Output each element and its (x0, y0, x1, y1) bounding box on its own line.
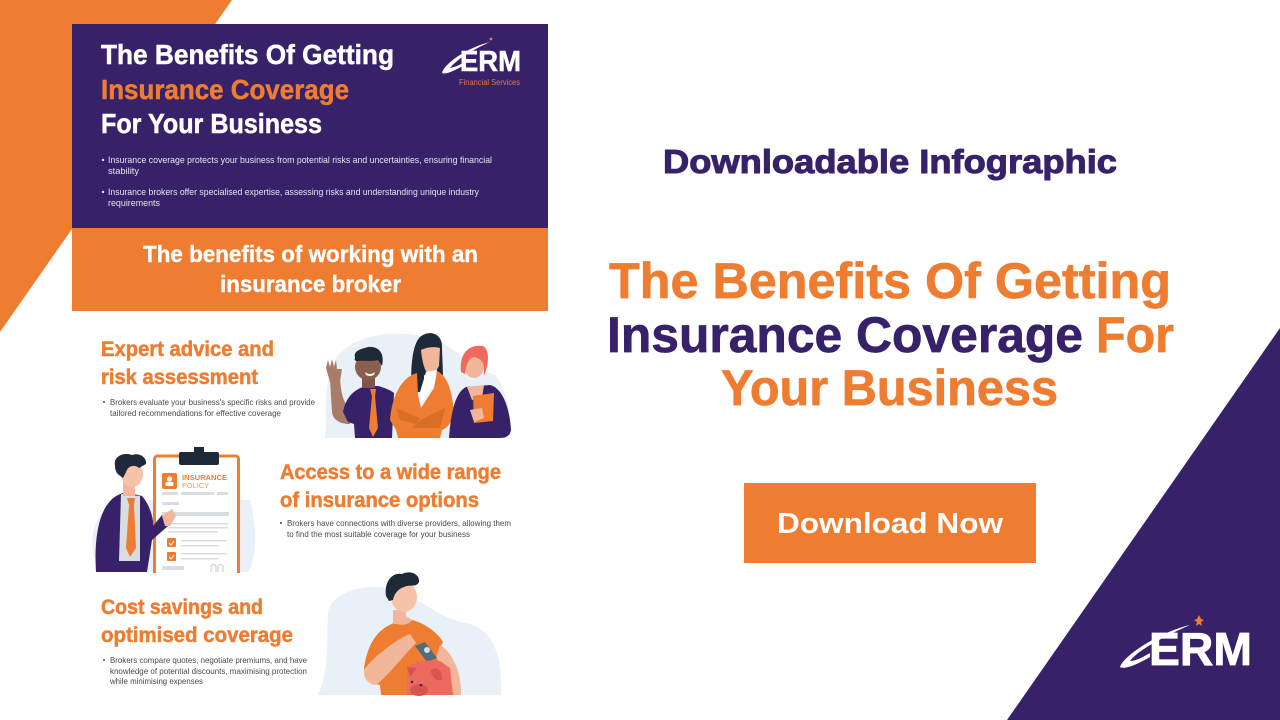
section: wide range of options (92, 447, 511, 573)
infographic title: For Your Business (101, 108, 322, 139)
clipboard: INSURANCE (182, 473, 227, 482)
man waving (326, 347, 394, 438)
heading: cost savings: optimised coverage (101, 623, 293, 647)
text: expert advice bullet (103, 397, 315, 418)
text: cost savings bullet (103, 655, 307, 686)
text: wide range bullet: Brokers have connections with diverse providers, allowing them (287, 518, 511, 528)
panel: orange section banner: The benefits of working with an (143, 241, 478, 267)
purple corner triangle (1007, 328, 1280, 720)
text: expert advice bullet: Brokers evaluate your business's specific risks and provide (110, 397, 315, 407)
heading: wide range of options: of insurance options (280, 488, 479, 512)
text: cost savings bullet: Brokers compare quotes, negotiate premiums, and have (110, 655, 307, 665)
clipboard (154, 447, 238, 573)
heading: expert advice (101, 337, 274, 389)
heading: expert advice: risk assessment (101, 365, 258, 389)
main heading: The Benefits Of Getting (609, 253, 1171, 309)
logo: ERM (1120, 615, 1252, 675)
text: cost savings bullet: knowledge of potential discounts, maximising protection (110, 666, 307, 676)
illustration: man with piggy bank (318, 572, 501, 696)
infographic title: Insurance Coverage (101, 74, 349, 105)
header bullet points: Insurance coverage protects your business from potential risks and uncertainties, ensuring financial (108, 155, 492, 166)
illustration: man with insurance clipboard (92, 447, 255, 573)
heading: wide range of options (280, 460, 501, 512)
main heading (607, 253, 1174, 416)
businessman (96, 454, 176, 572)
header bullet points: Insurance brokers offer specialised expertise, assessing risks and understanding unique industry (108, 187, 479, 198)
main heading: Insurance Coverage (607, 307, 1083, 363)
woman in orange jacket (390, 333, 454, 438)
text: expert advice bullet: tailored recommendations for effective coverage (110, 408, 281, 418)
logo: ERM Financial Services: ERM (460, 46, 521, 78)
heading: wide range of options: Access to a wide range (280, 460, 501, 484)
download button (744, 483, 1036, 563)
panel: infographic preview (72, 24, 548, 696)
infographic title: The Benefits Of Getting (101, 39, 394, 70)
panel: orange section banner: insurance broker (220, 271, 401, 297)
download button: Download Now (777, 508, 1003, 540)
orange corner triangle (0, 0, 232, 332)
main heading: For (1096, 307, 1174, 363)
logo: ERM: ERM (1149, 623, 1252, 675)
logo: ERM Financial Services: Financial Services (459, 78, 520, 87)
label: Downloadable Infographic: Downloadable Infographic (663, 143, 1117, 180)
section: cost savings (101, 572, 501, 696)
clipboard: POLICY (182, 481, 209, 490)
panel: orange section banner (72, 228, 548, 311)
header bullet points (102, 155, 492, 209)
illustration: three business people (325, 333, 511, 438)
text: wide range bullet: to find the most suitable coverage for your business (287, 529, 470, 539)
woman with folder (449, 346, 511, 438)
banknote (415, 642, 437, 662)
header bullet points: requirements (108, 198, 160, 209)
logo: ERM Financial Services (442, 38, 521, 87)
heading: cost savings (101, 595, 293, 647)
header bullet points: stability (108, 166, 139, 177)
panel: header (72, 24, 548, 228)
text: wide range bullet (280, 518, 511, 539)
infographic title (101, 39, 394, 139)
piggy bank (407, 661, 453, 695)
heading: expert advice: Expert advice and (101, 337, 274, 361)
text: cost savings bullet: while minimising expenses (109, 676, 203, 686)
heading: cost savings: Cost savings and (101, 595, 263, 619)
main heading: Your Business (721, 360, 1058, 416)
section: expert advice (101, 333, 511, 438)
